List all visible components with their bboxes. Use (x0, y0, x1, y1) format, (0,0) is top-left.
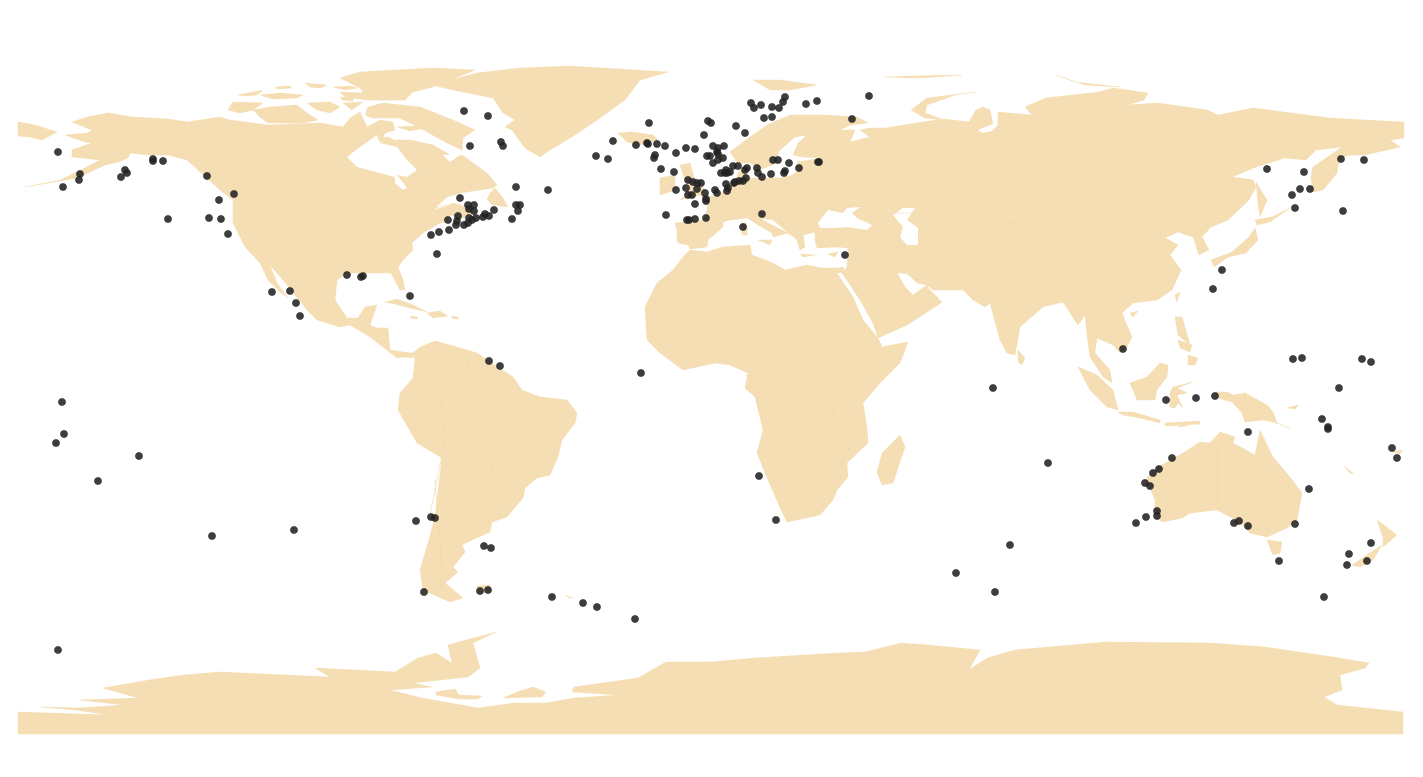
Hudson Bay (347, 135, 417, 190)
landmass: South America (398, 341, 577, 602)
landmass: Berkner Island (503, 687, 546, 698)
landmass: New Zealand (1352, 520, 1397, 567)
landmass: Australia (1147, 430, 1302, 537)
landmass: Caribbean islands (385, 299, 458, 319)
landmass: Falkland Islands and South Georgia (477, 585, 573, 598)
Black Sea (818, 207, 872, 230)
landmass: Tasmania (1267, 540, 1282, 555)
landmass: Southeast Asian islands and Papua (1018, 292, 1403, 474)
landmass: North America (25, 112, 497, 358)
landmass: Madagascar (877, 435, 905, 485)
Caspian Sea (893, 208, 918, 245)
country borders (168, 120, 1245, 590)
landmass: Eurasia (675, 88, 1404, 383)
Ungava Bay (443, 155, 460, 162)
landmass: Japan and Sakhalin (1211, 182, 1290, 267)
landmass: Greenland (432, 66, 668, 157)
Ob estuary hook (978, 124, 998, 133)
landmass: Antarctica (18, 632, 1403, 734)
landmass: Newfoundland (487, 188, 508, 207)
landmass: Weddell ice rise (436, 689, 482, 699)
landmass: Canadian Arctic islands (228, 68, 475, 150)
landmass: European and Arctic islands (618, 75, 1120, 257)
landmass: Africa (645, 245, 908, 522)
data points (52, 92, 1401, 654)
landmass: Chukotka wrap at map edge (18, 122, 57, 140)
